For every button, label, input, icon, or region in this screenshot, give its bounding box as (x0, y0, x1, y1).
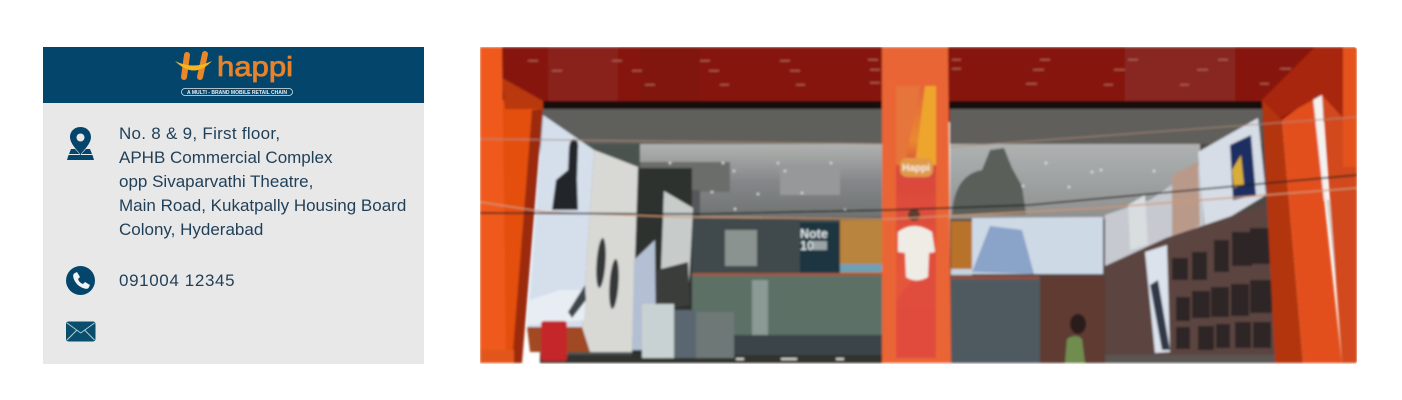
phone number: 091004 12345 (119, 271, 235, 290)
red bin (541, 321, 567, 361)
header band with logo (43, 47, 424, 103)
logo tagline pill: A MULTI - BRAND MOBILE RETAIL CHAIN (187, 90, 287, 96)
left orange pillar (480, 47, 543, 363)
centre orange column (882, 47, 951, 363)
overhead cables (480, 117, 1357, 219)
left glass frontage (540, 109, 885, 363)
icon: phone (66, 266, 95, 295)
shop sign number: 10 (800, 239, 814, 253)
shop sign text: Note (800, 227, 828, 241)
address text: APHB Commercial Complex (119, 148, 332, 167)
display shelves (1172, 228, 1272, 350)
address text: No. 8 & 9, First floor, (119, 124, 280, 143)
right orange pillars (1262, 47, 1357, 363)
storefront ceiling (480, 47, 1357, 122)
address text: opp Sivaparvathi Theatre, (119, 172, 313, 191)
left poster wall (527, 115, 734, 361)
panel: store contact card (43, 47, 424, 364)
address text: Main Road, Kukatpally Housing Board (119, 196, 406, 215)
logo wordmark: happi (217, 51, 293, 82)
vertical banner (896, 86, 936, 358)
logo: happi (175, 51, 293, 96)
address text: Colony, Hyderabad (119, 220, 263, 239)
poster figure (552, 139, 578, 210)
white display counter (642, 304, 674, 358)
address text (119, 124, 406, 239)
photo: Happi Mobiles storefront (480, 47, 1357, 364)
icon: location pin (67, 127, 94, 160)
pedestrian (1065, 314, 1086, 363)
right glass frontage (950, 109, 1280, 363)
icon: envelope (66, 322, 96, 342)
icon: logo H mark (175, 54, 212, 77)
banner logo text: Happi (902, 163, 930, 174)
black fascia band (543, 101, 1263, 109)
